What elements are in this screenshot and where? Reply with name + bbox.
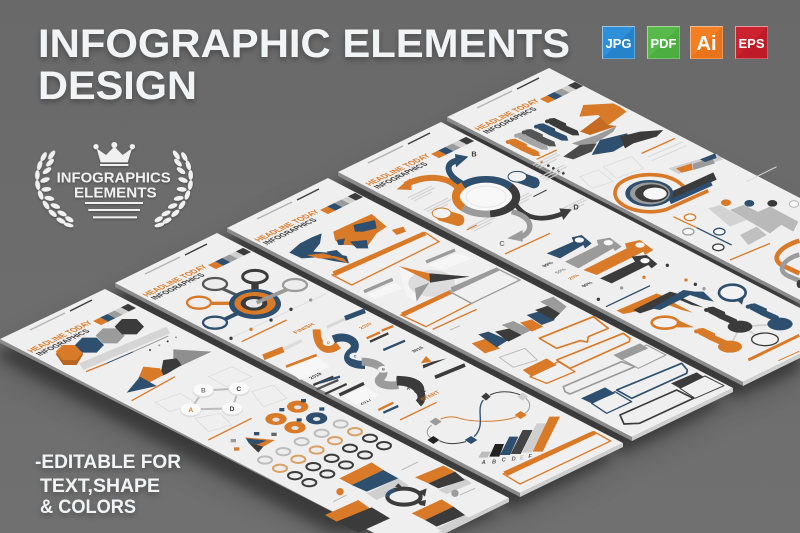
orange tab bbox=[557, 333, 630, 368]
bar chart A-F: C bbox=[502, 458, 507, 464]
centre ring bbox=[456, 180, 516, 213]
sheet 1 header: HEADLINE TODAY bbox=[25, 319, 95, 354]
cycle diagram: B bbox=[201, 388, 206, 395]
frames bbox=[155, 367, 287, 432]
grey tab bbox=[563, 362, 635, 394]
people silhouettes bbox=[506, 118, 579, 156]
percentages: 50% bbox=[554, 268, 569, 275]
letters: D bbox=[573, 202, 579, 211]
logo text bbox=[57, 170, 171, 202]
letters: C bbox=[499, 239, 505, 248]
EPS badge bbox=[736, 26, 768, 58]
grey marker bbox=[451, 488, 475, 497]
start arrow, loop diagram, bars and frame: START bbox=[419, 390, 443, 402]
cycle diagram bbox=[180, 382, 250, 417]
Ai badge: Ai bbox=[696, 33, 716, 55]
PDF badge bbox=[648, 26, 680, 58]
dark tab bbox=[620, 390, 693, 424]
snake labels bbox=[292, 322, 385, 406]
cycle diagram: D bbox=[230, 406, 235, 413]
start arrow, loop diagram, bars and frame bbox=[397, 346, 611, 484]
pills bbox=[263, 311, 365, 380]
sheet 5 header bbox=[472, 78, 583, 135]
process loop bbox=[427, 392, 530, 444]
percentages bbox=[541, 261, 595, 288]
sheet 5: people and 3D arrow bbox=[447, 68, 800, 304]
bar chart A-F: A bbox=[481, 460, 486, 466]
snake labels: D bbox=[327, 340, 330, 345]
ring icon and cards right bbox=[387, 462, 475, 532]
hub ring bbox=[387, 483, 427, 506]
left laurel bbox=[35, 149, 75, 228]
letters bbox=[471, 150, 579, 248]
dark arrow D bbox=[515, 203, 572, 220]
snake labels: 2020 bbox=[358, 322, 374, 330]
sheet 5 lower artwork: building and timeline bbox=[673, 199, 800, 288]
bar chart A-F: E bbox=[520, 455, 524, 461]
connected figures bbox=[694, 303, 793, 353]
sheet 5 header: HEADLINE TODAY bbox=[472, 97, 542, 132]
card 1 bbox=[339, 462, 408, 500]
sheet 2 header: INFOGRAPHICS bbox=[149, 272, 208, 301]
bar chart A-F: F bbox=[528, 454, 532, 460]
snake timeline and bars bbox=[229, 293, 422, 413]
labelled frames bbox=[499, 317, 724, 424]
main title: INFOGRAPHIC ELEMENTS bbox=[38, 22, 570, 66]
dark box bbox=[671, 372, 724, 398]
format badges bbox=[602, 26, 768, 58]
cycle diagram: A bbox=[188, 407, 193, 414]
map pins bbox=[652, 285, 746, 329]
snake labels: C bbox=[354, 353, 357, 358]
orange arrow A bbox=[397, 178, 458, 190]
hexagon row bbox=[56, 319, 144, 365]
navy arrow B bbox=[449, 154, 468, 185]
sheet 1 header bbox=[25, 300, 136, 357]
3D step arrow bbox=[563, 103, 663, 159]
captions and dots bbox=[537, 138, 687, 188]
start arrow bbox=[397, 378, 426, 397]
letters: B bbox=[471, 150, 477, 159]
four up arrows bbox=[547, 235, 657, 283]
crown bbox=[93, 142, 135, 166]
card 3 bbox=[415, 466, 472, 494]
percentages: 20% bbox=[567, 274, 582, 281]
orange frame bbox=[503, 431, 611, 484]
bar chart A-F bbox=[478, 417, 560, 466]
arrows and silhouettes bbox=[541, 235, 799, 361]
ring grid bbox=[258, 420, 391, 486]
logo text: ELEMENTS bbox=[74, 185, 157, 202]
mountain chart bbox=[127, 349, 212, 393]
compass bbox=[398, 266, 470, 302]
mini bar chart bbox=[668, 153, 723, 174]
concentric spiral bbox=[615, 175, 715, 212]
JPG badge: JPG bbox=[605, 36, 632, 51]
donut charts bbox=[265, 399, 327, 433]
editable note: & COLORS bbox=[40, 497, 136, 518]
world map bbox=[289, 214, 406, 263]
grey arrow C bbox=[507, 212, 530, 242]
bar chart A-F: D bbox=[512, 457, 516, 463]
dots bbox=[597, 264, 706, 301]
hub diagram bbox=[187, 270, 307, 329]
card 4 bbox=[412, 499, 472, 532]
JPG badge bbox=[602, 26, 634, 58]
snake bbox=[317, 329, 422, 403]
logo rules bbox=[85, 202, 143, 218]
PDF badge: PDF bbox=[650, 36, 677, 51]
main title: DESIGN bbox=[38, 64, 197, 108]
sheet 1: hexagons, mountains, cycle, donuts and rings bbox=[0, 289, 509, 533]
sheet 3 artwork bbox=[289, 214, 567, 353]
percentages: 90% bbox=[580, 281, 595, 288]
EPS badge: EPS bbox=[738, 36, 765, 51]
sheet 3 header: HEADLINE TODAY bbox=[252, 208, 322, 243]
stacked bar chart bbox=[472, 297, 567, 353]
speech bubble bbox=[539, 317, 608, 348]
faint text blocks bbox=[408, 153, 587, 231]
navy tab bbox=[617, 363, 687, 398]
grey box bbox=[613, 343, 666, 368]
sheet 1 header: INFOGRAPHICS bbox=[34, 328, 93, 357]
editable note: TEXT,SHAPE bbox=[40, 476, 160, 497]
card 2 bbox=[325, 500, 390, 533]
cycle diagram: C bbox=[236, 386, 241, 393]
sheet 4 header: INFOGRAPHICS bbox=[372, 161, 431, 190]
orange frame bbox=[748, 335, 799, 361]
sheet 4 header: HEADLINE TODAY bbox=[363, 152, 433, 187]
snake labels: 2019 bbox=[308, 372, 324, 380]
sheet 2: node hub, snake timeline, loop and bars bbox=[115, 233, 623, 497]
laurel logo bbox=[35, 142, 193, 228]
orange box bbox=[523, 358, 575, 383]
sheet 4 header bbox=[363, 133, 474, 190]
ribbons bbox=[617, 290, 714, 314]
editable note: -EDITABLE FOR bbox=[35, 452, 181, 473]
city building bbox=[708, 205, 798, 245]
small orange marker bbox=[333, 488, 347, 502]
band under hexagons bbox=[79, 327, 177, 372]
timeline with pins bbox=[673, 199, 799, 251]
pyramid bbox=[231, 432, 277, 453]
main title bbox=[38, 22, 570, 108]
sheet 2 header: HEADLINE TODAY bbox=[140, 263, 210, 298]
snake labels: FINISH bbox=[292, 323, 317, 335]
sheet 5 header: INFOGRAPHICS bbox=[481, 106, 540, 135]
year bars bbox=[313, 326, 405, 413]
circular flow diagram bbox=[397, 150, 579, 254]
snake labels: B bbox=[382, 367, 385, 372]
sheet 4: flow arrows and silhouettes bbox=[338, 122, 800, 386]
pills bbox=[432, 171, 534, 220]
sheet 1 artwork bbox=[56, 319, 408, 533]
loop shapes bbox=[777, 241, 800, 288]
navy box bbox=[581, 387, 632, 413]
grey frame bbox=[450, 267, 520, 303]
logo text: INFOGRAPHICS bbox=[57, 170, 171, 187]
pyramid bbox=[421, 356, 447, 368]
sheet 5 artwork bbox=[506, 103, 777, 212]
percentages: 99% bbox=[541, 261, 556, 268]
orange frame 2 bbox=[401, 290, 472, 327]
sheet 3 header: INFOGRAPHICS bbox=[261, 217, 320, 246]
Ai badge bbox=[690, 26, 722, 58]
start arrow: A bbox=[407, 386, 411, 391]
sheet 3: world map, compass and stacked frames bbox=[227, 178, 733, 441]
sheet 2 header bbox=[140, 244, 251, 301]
right laurel bbox=[153, 149, 193, 228]
start arrow, loop diagram, bars and frame: 2016 bbox=[410, 346, 426, 354]
bar chart A-F: B bbox=[492, 459, 496, 465]
snake labels: 2017 bbox=[358, 398, 374, 406]
editable note bbox=[35, 452, 181, 518]
orange frame 1 bbox=[332, 232, 439, 285]
sheet 3 header bbox=[252, 189, 363, 246]
grey pills bbox=[364, 250, 473, 298]
thin frame bbox=[499, 348, 537, 367]
